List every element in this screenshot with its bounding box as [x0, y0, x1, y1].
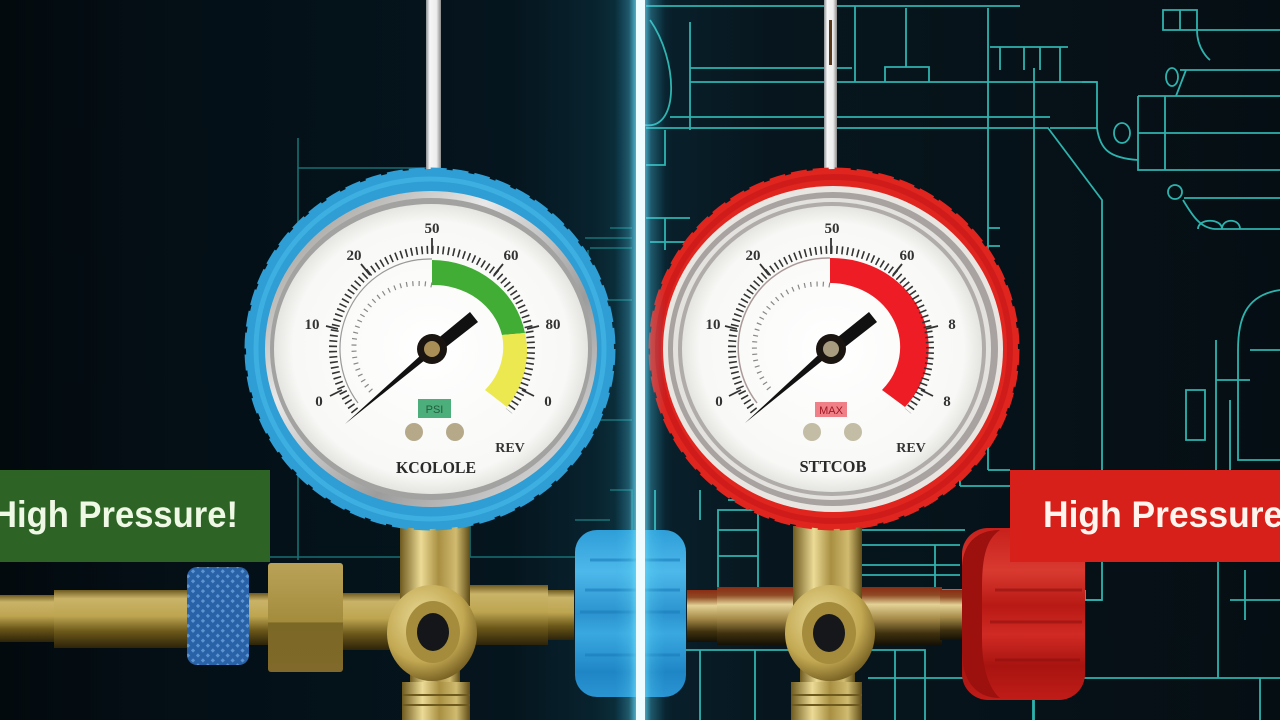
- blue rubber rim: [246, 169, 614, 529]
- dial screws: [405, 423, 464, 441]
- needle: [345, 312, 478, 424]
- needle: [745, 312, 877, 423]
- blueprint lines: left: [270, 138, 632, 560]
- brand text: STTCOB: [800, 457, 866, 476]
- unit badge: PSI: [426, 404, 443, 416]
- coloured zone: red: [830, 258, 929, 407]
- chrome bezel: [663, 186, 1003, 512]
- scale numbers: 60: [900, 248, 914, 264]
- scale numbers: 0: [715, 394, 723, 410]
- glowing divider: [615, 0, 665, 720]
- unit badge: MAX: [819, 405, 844, 417]
- blue knurled ring: [187, 567, 249, 665]
- neck: [249, 593, 269, 645]
- unit badge: [418, 399, 451, 418]
- scale numbers: 0: [315, 394, 323, 410]
- left stem: [426, 0, 441, 170]
- left manifold assembly: [0, 526, 686, 720]
- brand text: KCOLOLE: [396, 458, 476, 477]
- scale ticks: [326, 238, 539, 411]
- chrome bezel: [265, 191, 597, 507]
- dial screws: [803, 423, 862, 441]
- right manifold assembly: [687, 526, 1085, 720]
- green callout: [0, 470, 270, 562]
- scale numbers: [304, 221, 560, 410]
- port ring: [785, 585, 875, 681]
- right gauge: [650, 169, 1018, 529]
- scale numbers: 60: [504, 248, 518, 264]
- red valve knob: [962, 528, 1085, 700]
- unit text: REV: [495, 441, 525, 456]
- unit badge: [815, 402, 847, 417]
- vertical stem: [400, 526, 470, 606]
- vertical stem: [793, 526, 862, 606]
- scale numbers: 8: [948, 317, 956, 333]
- right stem: [824, 0, 837, 170]
- scale numbers: 80: [546, 317, 560, 333]
- brass hex nut: [268, 563, 343, 672]
- scale numbers: 0: [544, 394, 552, 410]
- scale numbers: 20: [346, 248, 362, 264]
- hose pipe: [0, 590, 189, 648]
- unit text: REV: [896, 441, 926, 456]
- blue valve knob: [575, 530, 686, 697]
- valve pipes: [687, 587, 970, 645]
- left gauge: [246, 169, 614, 529]
- scale numbers: 50: [824, 221, 840, 237]
- scale numbers: 8: [943, 394, 951, 410]
- red callout: [1010, 470, 1280, 562]
- scale numbers: 10: [304, 317, 320, 333]
- blueprint lines: right: [645, 6, 1280, 720]
- scale numbers: [706, 221, 956, 410]
- coloured zone: green: [432, 260, 525, 335]
- red rubber rim: [650, 169, 1018, 529]
- pipe to valve: [343, 585, 574, 650]
- scale ticks: [725, 238, 938, 411]
- scale numbers: 10: [706, 317, 720, 333]
- scale numbers: 20: [746, 248, 760, 264]
- scale numbers: 50: [424, 221, 440, 237]
- bottom fitting: [402, 665, 470, 720]
- bottom fitting: [791, 665, 862, 720]
- coloured zone: yellow: [485, 333, 527, 407]
- port ring: [387, 585, 477, 681]
